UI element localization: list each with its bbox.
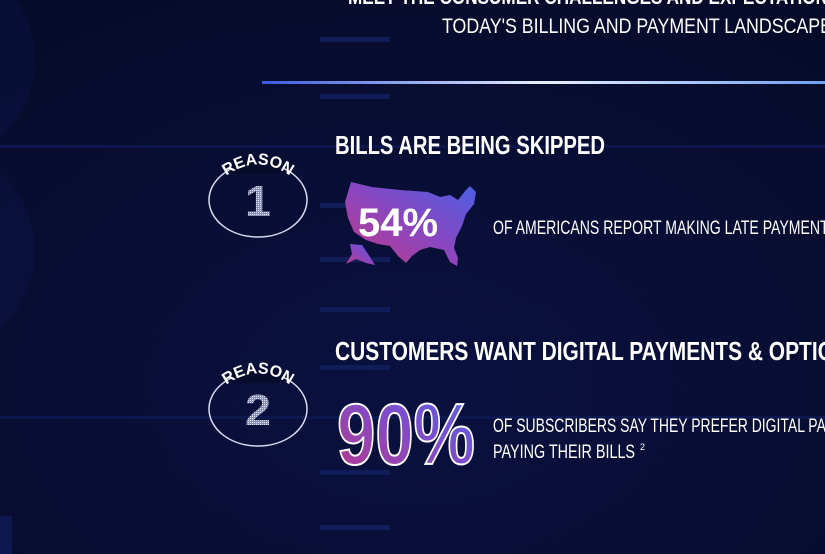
intro text xyxy=(348,0,825,38)
reason 1 badge: REASON xyxy=(221,154,295,176)
reason 1 badge xyxy=(208,154,308,238)
stat text 2: PAYING THEIR BILLS xyxy=(493,442,635,463)
stat text 2 xyxy=(493,416,825,463)
stat text 2: 2 xyxy=(640,442,645,452)
reason 2 badge xyxy=(208,362,308,447)
icon: US map with 54% xyxy=(345,182,476,266)
gradient divider xyxy=(262,81,825,84)
big stat 90%: 90% xyxy=(337,387,475,483)
reason 1 badge: 1 xyxy=(245,177,271,226)
icon: US map with 54%: 54% xyxy=(358,201,438,245)
reason 2 badge: REASON xyxy=(221,362,295,384)
reason 2 badge: 2 xyxy=(245,386,271,435)
heading 1: BILLS ARE BEING SKIPPED xyxy=(335,130,605,160)
